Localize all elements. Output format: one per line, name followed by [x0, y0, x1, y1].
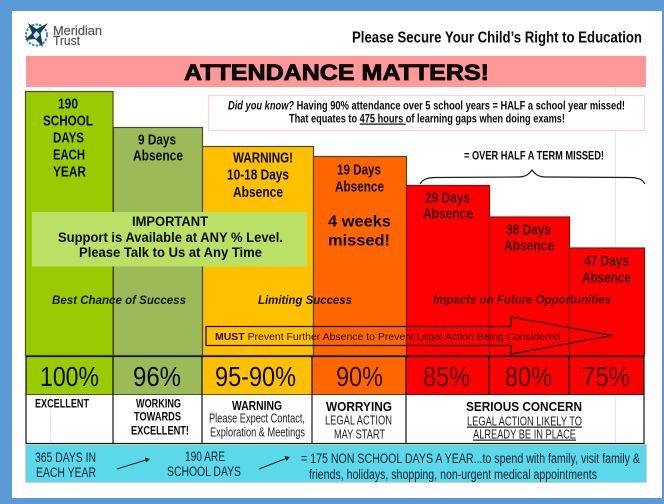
title banner	[26, 56, 646, 87]
bar: 80%: 38 Days	[506, 222, 551, 238]
bar: 96%: Absence	[133, 148, 183, 164]
arrow: to non school days	[259, 456, 290, 469]
label: working towards excellent: TOWARDS	[134, 412, 181, 424]
value: 90%: 90%	[336, 361, 383, 392]
callout: support available: IMPORTANT	[132, 214, 209, 229]
callout: did you know	[208, 96, 644, 130]
value: 80%: 80%	[505, 361, 552, 392]
percentage row	[26, 356, 644, 395]
label: serious concern: ALREADY BE IN PLACE	[473, 428, 576, 442]
callout: support available: Support is Available at ANY % Level.	[58, 230, 283, 245]
icon: star logo	[25, 23, 48, 47]
label: serious concern: LEGAL ACTION LIKELY TO	[467, 414, 582, 428]
label: warning	[209, 398, 305, 440]
text: 190 school days: SCHOOL DAYS	[167, 464, 241, 479]
logo wordmark: Trust	[53, 33, 80, 48]
bar: 100%: YEAR	[53, 164, 86, 180]
label: serious concern: SERIOUS CONCERN	[466, 399, 582, 414]
callout: over half a term missed with brace	[420, 148, 645, 184]
label: working towards excellent	[131, 398, 189, 438]
bar: 100%: DAYS	[53, 130, 84, 146]
label: worrying: WORRYING	[326, 399, 392, 414]
bar: 80%	[490, 217, 570, 356]
footer strip: days in the year	[26, 444, 646, 482]
label: worrying: LEGAL ACTION	[325, 414, 392, 428]
bar: 75%	[570, 248, 644, 356]
bar: 100%: SCHOOL	[43, 112, 93, 130]
bar: 90%: 19 Days	[337, 162, 381, 178]
bar: 95-90%	[202, 146, 314, 356]
callout: over half a term missed with brace: = OVER HALF A TERM MISSED!	[464, 148, 604, 162]
title banner: ATTENDANCE MATTERS!	[184, 60, 489, 85]
text: 175 non school days	[301, 451, 640, 482]
text: 365 days: EACH YEAR	[36, 465, 96, 480]
bar: 90%: missed!	[328, 232, 390, 250]
bar: 95-90%: 10-18 Days	[227, 166, 289, 184]
bar: 100%: 190	[58, 96, 78, 112]
label: serious concern	[466, 399, 582, 442]
bar: 100%	[26, 92, 113, 356]
arrow: must prevent further absence	[206, 317, 612, 354]
logo wordmark: Meridian	[53, 23, 102, 38]
bar: 85%: 29 Days	[425, 190, 470, 206]
bar: 75%: Absence	[582, 270, 631, 286]
logo: Meridian Trust	[25, 23, 102, 48]
value: 95-90%: 95-90%	[215, 361, 296, 392]
label: excellent: EXCELLENT	[35, 398, 89, 410]
status label row	[26, 395, 644, 444]
bar: 85%: Absence	[423, 206, 473, 222]
label: worrying	[325, 399, 392, 442]
bar: 95-90%: WARNING!	[233, 150, 293, 166]
bar: 96%	[114, 128, 202, 356]
bar: 90%: 4 weeks	[328, 214, 391, 230]
callout: support available: Please Talk to Us at Any Time	[79, 245, 262, 260]
label: impacts on future opportunities: Impacts on Future Opportunities	[433, 294, 611, 306]
bar: 90%: Absence	[335, 178, 384, 196]
text: 365 days: 365 DAYS IN	[35, 450, 96, 465]
bar chart: absence staircase	[26, 92, 644, 356]
label: worrying: MAY START	[334, 428, 385, 442]
label: warning: Please Expect Contact,	[209, 412, 305, 426]
label: limiting success: Limiting Success	[258, 295, 352, 307]
label: warning: Exploration & Meetings	[210, 426, 305, 440]
bar: 90%	[314, 156, 406, 356]
text: 190 school days	[167, 449, 241, 479]
bar: 96%: 9 Days	[138, 132, 176, 148]
bar: 75%: 47 Days	[584, 252, 629, 270]
arrow: to school days	[117, 458, 150, 469]
value: 85%: 85%	[423, 361, 470, 392]
arrow: must prevent further absence: MUST Prevent Further Absence to Prevent Legal Action Being Considered	[215, 332, 560, 343]
value: 96%: 96%	[133, 361, 181, 392]
bar: 100%: EACH	[53, 146, 85, 164]
logo wordmark	[53, 23, 102, 48]
value: 75%: 75%	[582, 361, 630, 392]
label: working towards excellent: WORKING	[136, 398, 181, 410]
text: 365 days	[35, 450, 96, 480]
text: 190 school days: 190 ARE	[185, 449, 225, 464]
label: warning: WARNING	[232, 398, 282, 413]
bar: 85%	[406, 186, 490, 356]
brace	[420, 170, 645, 184]
bar: 95-90%: Absence	[233, 184, 283, 201]
callout: did you know: That equates to 475 hours of learning gaps when doing exams!	[289, 112, 565, 126]
value: 100%: 100%	[40, 361, 99, 392]
label: working towards excellent: EXCELLENT!	[131, 426, 189, 438]
bar: 80%: Absence	[504, 238, 554, 254]
label: best chance of success: Best Chance of Success	[52, 295, 186, 307]
callout: support available	[32, 212, 307, 266]
